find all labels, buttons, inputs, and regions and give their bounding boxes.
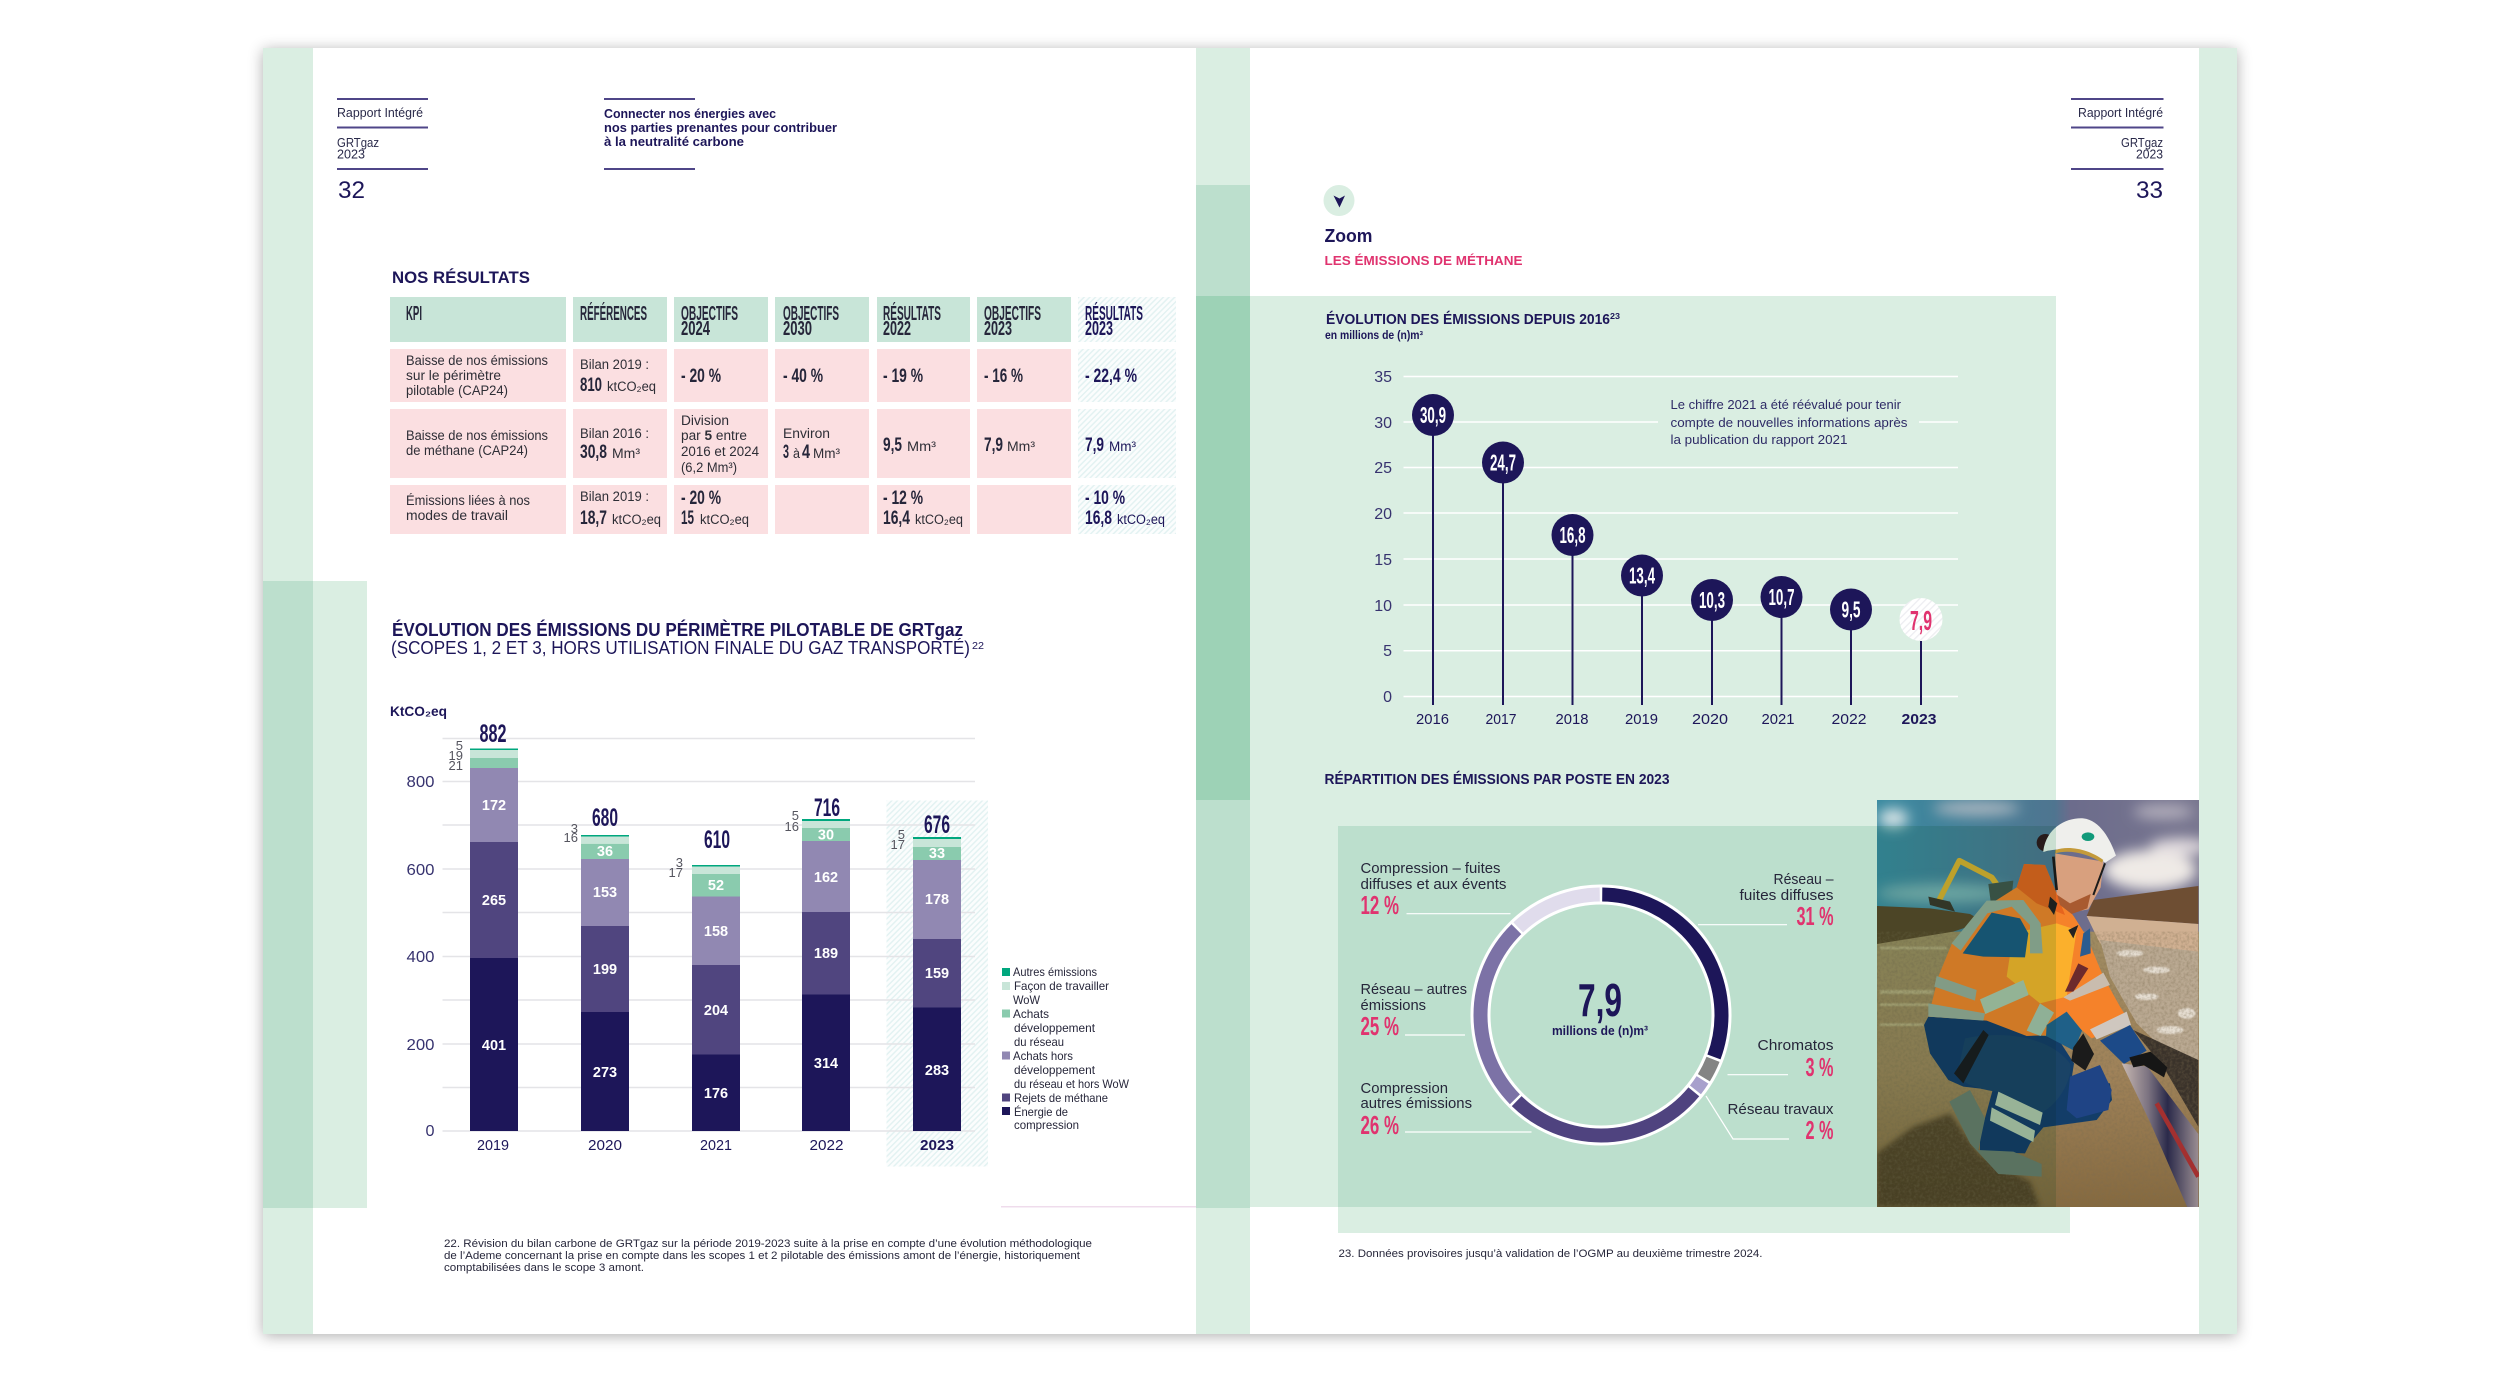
lollipop heads: 30,9 <box>1420 402 1446 428</box>
bar 2020: 16 <box>564 830 578 845</box>
bar 2022: 189 <box>814 946 838 962</box>
table row 2: Mm³ <box>907 439 937 454</box>
highlight 2023 <box>886 800 988 1166</box>
table row 3: ktCO₂eq <box>612 512 661 527</box>
table row 1: - 20 % <box>681 366 721 387</box>
legend: Énergie de <box>1014 1104 1068 1119</box>
table: KPI results <box>390 297 1176 534</box>
donut label: Réseau fuites 31 %: fuites diffuses <box>1740 887 1834 904</box>
bar 2023: 33 <box>929 846 945 862</box>
table row 1: Baisse de nos émissions <box>406 353 548 368</box>
legend: Façon de travailler <box>1014 979 1109 993</box>
panel: donut background <box>1338 826 2070 1233</box>
lollipop heads: 24,7 <box>1490 450 1516 476</box>
heading: methane evolution since 2016: ÉVOLUTION DES ÉMISSIONS DEPUIS 2016 <box>1326 311 1610 328</box>
bar 2019: 172 <box>482 798 506 814</box>
y axis labels: 0 <box>426 1123 435 1140</box>
bar 2022: 30 <box>818 828 834 844</box>
table row 2: 9,5 <box>883 435 902 456</box>
bar 2020: 153 <box>593 885 617 901</box>
table row 3: - 12 % <box>883 488 923 509</box>
table row 2: Mm³ <box>1007 439 1036 454</box>
table row 3: 16,4 <box>883 508 910 529</box>
donut label: Réseau autres 25 %: 25 % <box>1360 1011 1399 1041</box>
x axis years: 2023 <box>920 1137 954 1154</box>
right page header <box>2071 98 2164 170</box>
bar 2019 <box>449 720 518 1131</box>
donut label: Réseau autres 25 %: Réseau – autres <box>1360 981 1467 998</box>
y axis labels: 10 <box>1374 598 1392 615</box>
y axis labels: 15 <box>1374 552 1392 569</box>
table row 1: sur le périmètre <box>406 368 501 383</box>
table row 2: 2016 et 2024 <box>681 444 759 459</box>
table row 3: Bilan 2019 : <box>580 489 649 504</box>
table row 1 <box>390 349 1176 402</box>
trousers <box>1924 1017 2112 1153</box>
table row 2: Bilan 2016 : <box>580 426 649 441</box>
sleeve and gloves <box>2100 1025 2147 1064</box>
legend: du réseau et hors WoW <box>1014 1077 1130 1091</box>
legend: compression <box>1014 1118 1079 1132</box>
bar 2022: 716 <box>814 794 840 822</box>
table row 2: 30,8 <box>580 442 607 463</box>
y axis labels: 200 <box>406 1037 435 1054</box>
donut label: Chromatos 3 %: 3 % <box>1806 1052 1834 1082</box>
heading: methane evolution since 2016 <box>1325 311 1621 342</box>
right page header: Rapport Intégré <box>2078 105 2163 120</box>
bar 2022: 314 <box>814 1056 838 1072</box>
donut label: Réseau autres 25 % <box>1360 981 1467 1041</box>
table header row: RÉFÉRENCES <box>580 302 647 325</box>
right edge strip <box>2199 48 2237 1334</box>
heading: evolution des emissions perimetre pilotable: (SCOPES 1, 2 ET 3, HORS UTILISATION FINALE DU GAZ TRANSPORTÉ) <box>391 638 970 658</box>
annotation: 2021 note: Le chiffre 2021 a été réévalué pour tenir <box>1670 397 1902 412</box>
bar 2020: 36 <box>597 844 613 860</box>
bar 2020: 680 <box>592 804 618 832</box>
table row 2: Environ <box>783 426 830 441</box>
left page header: Rapport Intégré <box>337 105 423 120</box>
zoom subheading: LES ÉMISSIONS DE MÉTHANE <box>1324 253 1523 268</box>
table row 3: Émissions liées à nos <box>406 493 530 508</box>
legend <box>1002 965 1130 1132</box>
bar 2023: 159 <box>925 966 949 982</box>
table row 1: - 22,4 % <box>1085 366 1137 387</box>
donut label: Réseau fuites 31 %: 31 % <box>1796 901 1834 931</box>
table row 2: Mm³ <box>612 446 641 461</box>
table row 1: Bilan 2019 : <box>580 357 649 372</box>
lollipop heads: 7,9 <box>1910 605 1932 636</box>
table row 2: 4 <box>802 442 810 463</box>
chapter title <box>604 98 837 170</box>
donut label: Compression fuites 12 %: diffuses et aux évents <box>1360 876 1506 893</box>
table header row: 2022 <box>883 318 911 340</box>
unit label: KtCO₂eq <box>390 703 447 719</box>
bar 2019: 5 <box>456 738 463 753</box>
photo: worker kneeling by a pipeline <box>1877 800 2210 1208</box>
bar 2021: 52 <box>708 878 724 894</box>
donut label: Compression autres 26 %: 26 % <box>1360 1110 1399 1140</box>
pipe <box>2122 1063 2198 1207</box>
bar 2023: 5 <box>898 827 905 842</box>
legend: développement <box>1014 1021 1096 1035</box>
table row 2: (6,2 Mm³) <box>681 460 737 475</box>
donut label: Réseau fuites 31 %: Réseau – <box>1774 871 1834 888</box>
x axis years: 2018 <box>1556 711 1588 728</box>
legend: du réseau <box>1014 1035 1064 1049</box>
left page header: GRTgaz <box>337 135 379 150</box>
left page header: 2023 <box>337 146 365 162</box>
zoom heading: Zoom <box>1324 226 1372 246</box>
footnote 22: 22. Révision du bilan carbone de GRTgaz sur la période 2019-2023 suite à la prise en compte d’une évolution méthodologique <box>444 1238 1092 1250</box>
footnote 22 <box>444 1238 1092 1274</box>
chapter title: Connecter nos énergies avec <box>604 106 776 121</box>
table row 2: 7,9 <box>1085 435 1104 456</box>
bar 2019: 882 <box>480 720 506 748</box>
bar 2020: 3 <box>571 821 578 836</box>
table row 1: - 19 % <box>883 366 923 387</box>
bar 2022: 5 <box>792 808 799 823</box>
donut label: Réseau travaux 2 %: 2 % <box>1806 1115 1834 1145</box>
lollipop heads: 16,8 <box>1560 522 1586 548</box>
annotation: 2021 note: la publication du rapport 2021 <box>1670 432 1848 447</box>
x axis years: 2021 <box>1762 711 1794 728</box>
y axis labels <box>1374 369 1392 706</box>
table header row: 2030 <box>783 318 812 340</box>
legend: Rejets de méthane <box>1014 1091 1108 1105</box>
legend: Autres émissions <box>1013 965 1097 979</box>
right page header: GRTgaz <box>2121 135 2163 150</box>
x axis years: 2021 <box>700 1137 732 1154</box>
table header row: OBJECTIFS <box>783 303 839 325</box>
y axis labels: 35 <box>1374 369 1392 386</box>
donut centre value <box>1552 974 1648 1038</box>
page number 32: 32 <box>338 177 365 204</box>
lollipop heads <box>1412 394 1942 641</box>
head <box>2055 853 2103 913</box>
bar 2023: 676 <box>924 811 950 839</box>
bar 2019: 19 <box>449 748 463 763</box>
table row 3 <box>390 485 1176 534</box>
table row 3: 16,8 <box>1085 508 1112 529</box>
legend: WoW <box>1013 993 1041 1007</box>
table row 1: - 16 % <box>984 366 1023 387</box>
x axis years: 2022 <box>1832 711 1866 728</box>
table header row: 2023 <box>1085 318 1113 340</box>
bar 2021: 204 <box>704 1003 728 1019</box>
table row 2 <box>390 409 1176 478</box>
x axis years: 2019 <box>477 1137 509 1154</box>
table header row: 2023 <box>984 318 1012 340</box>
table row 2: par 5 entre <box>681 428 747 443</box>
donut centre value: millions de (n)m³ <box>1552 1024 1648 1038</box>
table row 2: de méthane (CAP24) <box>406 443 528 458</box>
table row 3: modes de travail <box>406 508 508 523</box>
lollipop heads: 13,4 <box>1629 562 1655 588</box>
page background <box>263 48 2237 1334</box>
bar 2020: 199 <box>593 962 617 978</box>
table header row: 2024 <box>681 318 711 340</box>
bar 2021 <box>669 826 740 1131</box>
bar 2021: 158 <box>704 924 728 940</box>
table row 1: pilotable (CAP24) <box>406 383 508 398</box>
bar 2020: 273 <box>593 1065 617 1081</box>
bar 2022: 16 <box>785 819 799 834</box>
y axis labels: 0 <box>1383 689 1392 706</box>
x axis years: 2022 <box>810 1137 844 1154</box>
table row 2: 7,9 <box>984 435 1003 456</box>
x axis years: 2023 <box>1902 711 1936 728</box>
x axis years: 2020 <box>1692 711 1728 728</box>
footnote 23: 23. Données provisoires jusqu’à validation de l’OGMP au deuxième trimestre 2024. <box>1338 1248 1762 1260</box>
y axis labels: 5 <box>1383 643 1392 660</box>
chapter title: à la neutralité carbone <box>604 134 744 149</box>
heading: nos résultats: NOS RÉSULTATS <box>392 268 530 287</box>
y axis labels: 600 <box>406 862 435 879</box>
y axis labels: 25 <box>1374 460 1392 477</box>
table row 3: ktCO₂eq <box>1117 512 1165 527</box>
bar 2019: 21 <box>449 758 463 773</box>
bar 2022 <box>785 794 850 1131</box>
donut label: Réseau travaux 2 %: Réseau travaux <box>1728 1101 1834 1118</box>
bar 2021: 17 <box>669 865 683 880</box>
donut label: Chromatos 3 % <box>1728 1037 1834 1082</box>
lollipop heads: 9,5 <box>1842 596 1861 622</box>
donut centre value: 7,9 <box>1578 974 1622 1026</box>
footnote 22: de l’Ademe concernant la prise en compte dans les scopes 1 et 2 pilotable des émissions amont de l’énergie, historiquement <box>444 1250 1080 1262</box>
heading: methane evolution since 2016: en millions de (n)m³ <box>1325 330 1423 342</box>
table row 2: Division <box>681 413 729 428</box>
bar chart: emissions by year <box>390 703 988 1166</box>
table row 3: ktCO₂eq <box>700 512 749 527</box>
x axis years: 2020 <box>588 1137 622 1154</box>
lollipop chart: methane emissions <box>1374 369 1958 728</box>
legend: développement <box>1014 1063 1096 1077</box>
y axis labels: 20 <box>1374 506 1392 523</box>
table row 3: 15 <box>681 508 694 529</box>
donut label: Compression fuites 12 %: Compression – fuites <box>1360 860 1500 877</box>
bar 2021: 176 <box>704 1086 728 1102</box>
table row 3: - 10 % <box>1085 488 1125 509</box>
table header row <box>390 297 1176 342</box>
table header row: RÉSULTATS <box>1085 302 1143 325</box>
bar 2019: 265 <box>482 893 506 909</box>
excavator <box>1938 861 1998 902</box>
bar 2023 <box>891 811 961 1131</box>
heading: breakdown by item: RÉPARTITION DES ÉMISSIONS PAR POSTE EN 2023 <box>1324 771 1670 788</box>
heading: evolution des emissions perimetre pilotable: 22 <box>972 641 984 652</box>
x axis years <box>477 1137 954 1154</box>
panel: right page pale background <box>1250 296 2056 1207</box>
donut label: Chromatos 3 %: Chromatos <box>1758 1037 1834 1054</box>
donut label: Réseau autres 25 %: émissions <box>1360 997 1426 1014</box>
heading: methane evolution since 2016: 23 <box>1610 312 1621 321</box>
table header row: KPI <box>406 303 422 325</box>
table row 2: à <box>793 446 800 461</box>
right page header: 2023 <box>2136 146 2163 162</box>
bar 2023: 283 <box>925 1063 949 1079</box>
table row 2: Baisse de nos émissions <box>406 428 548 443</box>
table row 1: - 40 % <box>783 366 823 387</box>
table row 1: ktCO₂eq <box>607 379 656 394</box>
donut label: Compression autres 26 %: Compression <box>1360 1080 1448 1097</box>
lollipop heads: 10,7 <box>1768 584 1794 610</box>
lollipop heads: 10,3 <box>1699 587 1725 613</box>
page shadow <box>263 48 2237 1334</box>
table row 2: Mm³ <box>1109 439 1136 454</box>
y axis labels: 400 <box>406 949 435 966</box>
spine colour strips <box>1196 48 1250 1334</box>
table header row: RÉSULTATS <box>883 302 941 325</box>
page number 33: 33 <box>2136 177 2163 204</box>
y axis labels: 30 <box>1374 415 1392 432</box>
legend: Achats hors <box>1013 1049 1073 1063</box>
table row 3: - 20 % <box>681 488 721 509</box>
table row 2: Mm³ <box>813 446 840 461</box>
annotation: 2021 note <box>1670 397 1908 447</box>
bar 2020 <box>564 804 629 1131</box>
bar 2023: 178 <box>925 892 949 908</box>
donut label: Compression fuites 12 % <box>1360 860 1510 920</box>
left page header <box>337 98 428 170</box>
legend: Achats <box>1013 1007 1049 1021</box>
green overlay on the photo <box>1877 826 2056 1207</box>
donut chart: emissions by item <box>1480 894 1722 1136</box>
donut label: Compression autres 26 %: autres émissions <box>1360 1095 1472 1112</box>
chapter title: nos parties prenantes pour contribuer <box>604 120 837 135</box>
table row 1: 810 <box>580 375 602 396</box>
annotation: 2021 note: compte de nouvelles informations après <box>1670 415 1908 430</box>
x axis years: 2016 <box>1416 711 1449 728</box>
x axis years <box>1416 711 1936 728</box>
bar 2019: 401 <box>482 1038 506 1054</box>
heading: evolution des emissions perimetre pilotable <box>391 619 984 658</box>
y axis labels: 800 <box>406 774 435 791</box>
icon: zoom arrow <box>1324 185 1354 216</box>
donut label: Réseau travaux 2 % <box>1706 1096 1834 1145</box>
boots <box>1949 1090 2042 1177</box>
table header row: OBJECTIFS <box>984 303 1041 325</box>
left page colour strips <box>263 48 367 1334</box>
bar 2022: 162 <box>814 870 838 886</box>
table row 2: 3 <box>783 442 789 463</box>
footnote 22: comptabilisées dans le scope 3 amont. <box>444 1262 644 1274</box>
bar 2021: 610 <box>704 826 730 854</box>
lollipop stems <box>1433 415 1921 705</box>
table row 3: 18,7 <box>580 508 607 529</box>
heading: evolution des emissions perimetre pilotable: ÉVOLUTION DES ÉMISSIONS DU PÉRIMÈTRE PILOTABLE DE GRTgaz <box>392 619 963 640</box>
donut label: Réseau fuites 31 % <box>1698 871 1834 931</box>
donut label: Compression autres 26 % <box>1360 1080 1532 1140</box>
x axis years: 2017 <box>1486 711 1516 728</box>
table row 3: ktCO₂eq <box>915 512 963 527</box>
x axis years: 2019 <box>1625 711 1658 728</box>
y axis labels <box>406 774 435 1140</box>
bar 2023: 17 <box>891 837 905 852</box>
bar 2021: 3 <box>676 855 683 870</box>
jacket <box>1928 864 2131 1038</box>
donut label: Compression fuites 12 %: 12 % <box>1360 890 1399 920</box>
table header row: OBJECTIFS <box>681 303 738 325</box>
